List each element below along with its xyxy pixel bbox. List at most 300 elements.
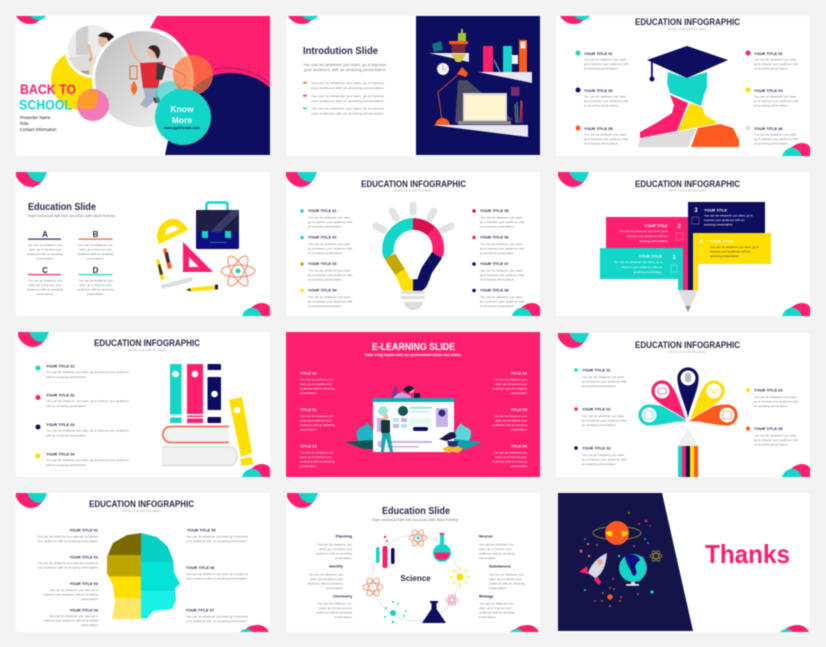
banner 3: navy: amazing presentation [704,222,733,226]
bullet list: You can do whatever you want, go à impress [311,81,385,85]
item 06: YOUR TITLE 06 [480,234,509,240]
item 04: YOUR TITLE 04 [46,452,75,456]
item 03: impress your audience with an amazing [44,592,98,596]
item 03: an amazing presentation [582,462,616,466]
banner 2: pink: YOUR TITLE [644,223,668,228]
item 04: presentation [510,391,527,395]
banner 4: yellow [693,233,771,290]
item 02 [36,392,129,408]
biology text: presentation [479,615,496,619]
item 05: You can do whatever you want, [754,434,797,438]
banner 4: yellow: impress your audience with an [710,250,751,254]
item 05: You can do whatever you [493,414,527,418]
photo circle: jumping girl [92,28,194,130]
chemistry text: want, go à impress your [319,606,352,610]
item 03 [36,422,129,438]
neuron text: audience with an amazing [479,552,515,556]
slide 4: education slide with school items [16,172,270,316]
item 01: YOUR TITLE 01 [46,364,75,368]
item 03: an amazing presentation [308,278,342,282]
item 05: YOUR TITLE 05 [754,426,783,431]
bullet list: your audience with an amazing presentation [311,86,384,90]
icon: atom [221,253,255,289]
item 01: an amazing presentation [584,66,618,70]
neuron text: Neuron [479,534,493,538]
item 03: TITLE 03 [300,444,317,448]
column B: You can do whatever you [78,243,113,247]
title: EDUCATION INFOGRAPHIC [635,17,740,28]
corner decoration [18,332,49,347]
neuron text: You can do whatever you [479,542,514,546]
banner 1: teal: 1 [672,255,676,261]
item 04: with an amazing presentation [46,463,87,467]
corner decoration bottom [240,625,269,632]
item 05: an amazing presentation [754,442,788,446]
column B: want, go à impress your [79,248,112,252]
icon: sun [450,567,470,587]
banner 1: teal: YOUR TITLE [639,254,662,258]
banner 2: pink: 2 [677,224,681,230]
column B [78,230,114,260]
column A: You can do whatever you [28,243,63,247]
item 03 [576,88,629,108]
item 05 [492,407,528,432]
item 03 [574,446,627,466]
icon: teal molecule [384,601,407,623]
item 03: You can do whatever you want, go à impress your audience [46,428,129,432]
heading: Education Slide [28,201,96,213]
substance text [489,564,525,590]
headline [19,82,76,112]
item 06 [186,565,248,580]
item 06: audience with an amazing [492,460,527,464]
item 04: You can do whatever you want, [754,395,797,399]
item 06: want, go à impress your [495,455,527,459]
icon: set square [183,242,213,272]
item 02: YOUR TITLE 02 [46,392,75,398]
item 03: with an amazing presentation [46,434,87,438]
item 05: You can do whatever you want, [480,216,523,220]
corner decoration bottom [782,303,810,316]
corner decoration bottom [510,625,539,632]
item 02: You can do whatever you want, go à impress your audience [46,399,129,403]
column C: You can do whatever you [28,278,63,282]
item 06: go à impress your audience with [480,246,525,250]
icon: ruler [161,277,193,289]
chemistry text: audience with an amazing [316,610,352,614]
item 02: You can do whatever you [300,414,334,418]
item 06: your audience with an amazing presentation [186,576,247,580]
item 04: YOUR TITLE 04 [308,288,337,292]
icon: protractor [157,219,188,244]
icon: school bag [196,202,239,249]
item 05: You can do whatever you want, [584,132,627,136]
item 04: You can do whatever you want go à [49,614,98,618]
item 08: YOUR TITLE 08 [480,288,509,292]
icon: round flask [433,533,451,562]
item 01 [574,368,627,388]
planning text: audience with an amazing [316,552,352,556]
item 08 [472,288,525,308]
item 04: an amazing presentation [308,304,342,308]
item 01: your audience with an amazing presentation [37,539,98,543]
center label: Science [400,574,431,583]
chemistry text [316,594,353,619]
presenter details: Contact Information [20,127,57,132]
item 03: presentation [81,597,98,601]
subtitle: WRITE YOUR SUBTITLE HERE [394,188,432,192]
icon: crayons [156,248,172,280]
banner 3: navy: impress your audience with an [704,218,745,222]
icon: olive molecule [650,550,662,562]
planning text: presentation [335,556,352,560]
item 02: You can do whatever you want, [582,414,625,418]
substance text: audience with an amazing [489,582,525,586]
item 02 [300,407,335,432]
corner decoration [560,16,590,24]
column A: A [42,230,48,239]
chemistry text: You can do whatever you [317,602,352,606]
intro paragraph [303,63,386,72]
item 01 [576,50,629,70]
column C: want, go à impress your [29,283,61,287]
column D: want, go à impress your [79,283,112,287]
item 01: with an amazing presentation [46,375,87,379]
corner decoration bottom [782,464,810,477]
intro paragraph: your audience with an amazing presentation [304,68,386,72]
item 01: You can do whatever you want, [584,58,627,62]
icon: navy flask [422,601,446,623]
item 05: an amazing presentation [480,224,514,228]
item 07 [186,608,248,623]
title: EDUCATION INFOGRAPHIC [94,338,200,349]
item 02: YOUR TITLE 02 [308,234,337,240]
item 03: go à impress your audience with [308,273,353,277]
item 04: an amazing presentation [754,104,788,108]
navy panel [558,493,693,631]
item 06 [492,444,528,468]
neuron text: presentation [479,556,496,560]
item 02: TITLE 02 [300,407,317,412]
item 01: go à impress your audience with [582,380,627,384]
planning text [316,534,353,560]
item 04: audience with an amazing [492,386,527,390]
item 05: audience with an amazing [492,423,527,427]
pencil [678,428,698,477]
item 07: YOUR TITLE 07 [480,261,509,266]
item 03: YOUR TITLE 03 [582,446,611,450]
title: E-LEARNING SLIDE [372,342,455,353]
item 04: go à impress your audience with [754,400,799,404]
teal know more circle: Know [170,104,194,114]
item 08: You can do whatever you want, [480,295,523,299]
corner decoration bottom [512,303,540,316]
item 01: TITLE 01 [300,370,317,376]
biology text: audience with an amazing [479,610,515,614]
item 02: an amazing presentation [582,423,616,427]
intro paragraph: You can do whatever you want, go à impress [303,63,386,67]
item 02: go à impress your audience with [308,246,353,250]
icon: orange node cluster [594,587,622,607]
item 06: YOUR TITLE 06 [754,126,783,131]
icon: rocket [579,553,607,585]
substance text: Substances [489,564,511,568]
slide 7: books infographic [16,332,270,477]
slide 1: back to school [16,16,270,156]
banner 3: navy: YOUR TITLE [704,208,728,212]
item 02: You can do whatever you want, [308,242,351,246]
item 04 [746,388,799,408]
item 06 [472,234,525,255]
item 03: You can do whatever you [300,450,334,454]
icon: orange atom [363,576,383,598]
item 07 [472,261,525,282]
item 07: an amazing presentation [480,278,514,282]
item 02: go à impress your audience with [582,418,627,422]
subtitle: WRITE YOUR SUBTITLE HERE [668,27,706,31]
item 03: YOUR TITLE 03 [584,88,613,93]
item 03: go à impress your audience with [584,99,629,103]
item 07: go à impress your audience with [480,273,525,277]
chemistry text: presentation [335,615,352,619]
item 03 [300,444,335,468]
subheading: Nam excesud falli into success with Atoll Rotchy [28,214,115,218]
item 03: You can do whatever you want, [584,94,627,98]
item 06: You can do whatever you [493,450,527,454]
item 04: TITLE 04 [510,370,528,376]
item 08: go à impress your audience with [480,300,525,304]
icon: planet [593,521,641,545]
yellow crescent [51,50,111,110]
column B: presentation [87,256,104,260]
item 02 [574,406,627,427]
item 03: You can do whatever you want, [308,268,351,272]
item 07: YOUR TITLE 07 [186,608,214,612]
item 05 [576,126,629,146]
item 03: YOUR TITLE 03 [69,581,99,586]
bullet list: your audience with an amazing presentation [311,112,384,116]
item 06: YOUR TITLE 06 [186,565,215,570]
column A [27,230,63,260]
banner 4: yellow: YOUR TITLE [710,238,734,244]
item 04: You can do whatever you want, [308,295,351,299]
item 02: YOUR TITLE 02 [69,554,99,560]
item 04: You can do whatever you want, go à impress your audience [46,458,129,462]
item 03: You can do whatever you want go à [49,588,98,592]
subtitle: WRITE YOUR SUBTITLE HERE [128,348,166,352]
item 01: go à impress your audience with [584,62,629,66]
item 04: an amazing presentation [754,404,788,408]
item 06: TITLE 06 [510,444,528,448]
item 05: your audience with an amazing presentation [186,539,247,543]
column A: presentation [36,256,54,260]
column B: B [93,230,99,239]
graduate figure with cap [638,46,739,147]
photo circle: teacher at laptop [64,25,115,79]
substance text: presentation [489,586,506,590]
subtitle: WRITE YOUR SUBTITLE HERE [122,509,160,513]
column D: audience with an amazing [78,288,114,292]
item 01 [300,208,353,228]
item 04: want, go à impress your [495,382,527,386]
identify text: Identify [329,564,344,568]
corner decoration [558,172,589,187]
petal graphic [638,367,738,426]
item 03: audience with an amazing [300,460,335,464]
corner decoration bottom [242,303,270,316]
corner decoration [287,493,318,508]
item 07: You can do whatever you want go à impress [186,614,248,618]
item 01: You can do whatever you want go à impress [37,534,98,538]
headline: SCHOOL [19,98,72,112]
slide 3: graduate infographic [556,16,810,156]
slide 9: flower pencil infographic [556,333,810,477]
ring [372,535,458,621]
item 04: YOUR TITLE 04 [754,88,783,93]
banner 1: teal: You can do whatever you want, go à [614,260,662,264]
navy panel [416,16,540,155]
corner decoration [16,16,46,24]
item 05 [746,426,799,446]
item 05: TITLE 05 [510,407,528,412]
item 05: go à impress your audience with [480,220,525,224]
item 03: want, go à impress your [300,455,332,459]
corner decoration [558,333,589,348]
item 01: YOUR TITLE 01 [584,51,613,56]
item 01 [36,364,129,379]
item 01: audience with an amazing [300,386,335,390]
illustration: online learning window [345,386,482,453]
planning text: You can do whatever you [317,542,352,546]
books graphic [162,364,253,466]
item 01: an amazing presentation [308,224,342,228]
column D [78,266,114,296]
item 01: presentation [300,391,317,395]
heading: Introdution Slide [303,46,378,57]
item 01: YOUR TITLE 01 [308,208,337,213]
chemistry text: Chemistry [333,594,353,598]
item 06: You can do whatever you want, [480,242,523,246]
subtitle: WRITE YOUR SUBTITLE HERE [668,350,706,354]
item 01: an amazing presentation [582,384,616,388]
item 02: an amazing presentation [308,251,342,255]
scattered stars [580,512,654,595]
item 08: an amazing presentation [480,304,514,308]
item 02: your audience with an amazing presentation [37,566,98,570]
item 01 [37,528,99,543]
bullet list: You can do whatever you want, go à impress [311,106,385,110]
banner 2: pink: amazing presentation [639,239,668,243]
item 05: want, go à impress your [495,418,527,422]
item 05: go à impress your audience with [584,137,629,141]
icon: atom top [409,528,427,548]
bullet list: You can do whatever you want, go à impress [311,94,385,98]
item 04: go à impress your audience with [754,99,799,103]
item 03: YOUR TITLE 03 [46,422,75,427]
item 03 [44,581,99,601]
item 06: an amazing presentation [754,142,788,146]
slide 2: introduction [286,16,540,156]
corner decoration bottom [242,464,270,477]
item 02 [746,50,799,70]
light bulb graphic [376,205,451,310]
item 02 [300,234,353,255]
banner 3: navy: You can do whatever you want, go à [704,214,753,218]
subtitle: WRITE YOUR SUBTITLE HERE [668,188,706,192]
identify text: presentation [326,586,343,590]
item 04: go à impress your audience with [308,300,353,304]
item 05: YOUR TITLE 05 [187,528,216,532]
pink translucent circle [77,89,109,121]
item 02 [37,554,99,570]
title: EDUCATION INFOGRAPHIC [361,179,466,190]
item 03: go à impress your audience with [582,458,627,462]
banner 4: yellow: amazing presentation [710,254,739,258]
title: EDUCATION INFOGRAPHIC [89,499,194,510]
item 04 [746,88,799,108]
corner decoration bottom [782,143,810,156]
item 02: want, go à impress your [300,418,332,422]
bullet list [303,81,385,116]
item 02: YOUR TITLE 02 [582,406,611,412]
item 02: presentation [300,428,317,432]
slide 6: pencil infographic [556,172,810,316]
illustration: desk shelves [429,29,532,137]
subtitle: Make a big impact with our professional slides and charts [365,353,461,357]
item 01: You can do whatever you [300,378,334,382]
item 04: You can do whatever you [493,378,527,382]
item 05: YOUR TITLE 05 [584,126,613,131]
item 06: presentation [510,464,527,468]
item 01: want, go à impress your [300,382,332,386]
faded teal circle [155,81,185,111]
item 01: go à impress your audience with [308,220,353,224]
column B: audience with an amazing [78,252,114,256]
banner 4: yellow: You can do whatever you want, go à [710,245,759,249]
banner 2: pink [606,217,688,290]
slide 10: head infographic [16,493,270,632]
item 03: presentation [300,464,317,468]
thanks text: Thanks [705,539,790,569]
head graphic [100,533,183,619]
substance text: You can do whatever you [489,572,524,576]
item 04: YOUR TITLE 04 [69,608,99,612]
banner 1: teal [600,248,683,290]
bullet list: your audience with an amazing presentation [311,99,384,103]
heading: Education Slide [382,505,450,517]
item 02: with an amazing presentation [46,404,87,408]
planning text: want, go à impress your [319,547,352,551]
presenter details: Presenter Name [20,115,51,120]
corner decoration [288,16,318,24]
item 06: go à impress your audience with [754,137,799,141]
item 03: YOUR TITLE 03 [308,261,337,266]
identify text: You can do whatever you [308,572,343,576]
orange overlap [78,91,98,109]
item 02: an amazing presentation [754,66,788,70]
item 01: YOUR TITLE 01 [69,528,99,532]
neuron text [479,534,515,560]
headline: BACK TO [20,82,76,97]
column C: audience with an amazing [27,288,63,292]
neuron text: want, go à impress your [479,547,512,551]
biology text: want, go à impress your [479,606,512,610]
teal know more circle [155,89,211,145]
slide 12: thanks [558,493,810,632]
column C [27,266,63,296]
item 04 [300,288,353,308]
item 06: an amazing presentation [480,251,514,255]
